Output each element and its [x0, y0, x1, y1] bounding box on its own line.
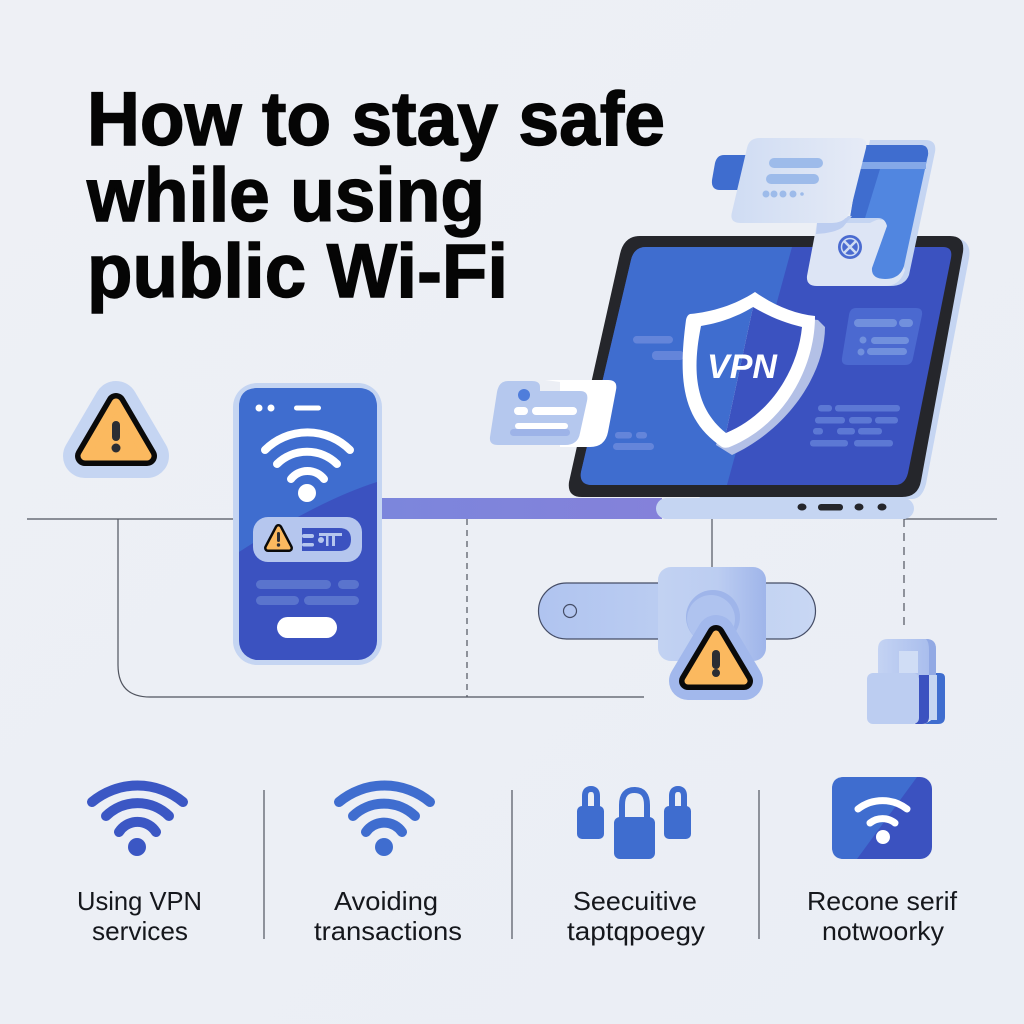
phone status bar	[256, 404, 321, 412]
back panel	[820, 140, 935, 286]
label	[807, 886, 958, 946]
shield outer	[683, 292, 815, 448]
phone text bars	[256, 580, 359, 605]
title: public Wi-Fi	[87, 229, 508, 314]
title: How to stay safe	[87, 77, 665, 162]
laptop	[569, 236, 969, 519]
shield inner	[697, 307, 802, 433]
laptop screen	[581, 247, 951, 485]
connector bar	[382, 498, 662, 519]
label: Recone serif	[807, 886, 958, 916]
label	[567, 886, 705, 946]
blue panel	[850, 145, 928, 279]
label: taptqpoegy	[567, 916, 705, 946]
icon: wifi tile	[832, 777, 932, 859]
blue card	[490, 381, 587, 445]
laptop back edge	[640, 238, 969, 499]
label: services	[92, 916, 188, 946]
phone body	[233, 383, 382, 665]
shield depth	[716, 298, 825, 455]
main card	[731, 138, 866, 234]
phone screen	[239, 388, 377, 660]
lower card	[807, 219, 905, 286]
connector lines	[27, 519, 997, 697]
item: network	[807, 777, 958, 946]
item: using VPN services	[77, 786, 202, 946]
warning icon: left	[85, 403, 147, 456]
shield	[683, 292, 825, 455]
white card	[545, 380, 616, 447]
icon: close circle	[838, 235, 862, 259]
icon: wifi	[92, 786, 183, 856]
screen text left	[613, 336, 684, 450]
laptop base	[656, 498, 914, 519]
label: Using VPN	[77, 886, 202, 916]
label: transactions	[314, 916, 462, 946]
alert pill	[253, 517, 362, 562]
clasp	[658, 567, 766, 661]
icon: wifi	[339, 786, 430, 856]
label: Avoiding	[334, 886, 438, 916]
floating cards top	[712, 138, 935, 286]
title: while using	[86, 153, 485, 238]
blue tab	[712, 155, 750, 190]
item: locks	[567, 789, 705, 946]
screen panel right	[842, 308, 922, 365]
floating card left	[490, 380, 616, 447]
title	[86, 77, 665, 314]
label	[314, 886, 462, 946]
label: Seecuitive	[573, 886, 697, 916]
padlock strap	[538, 567, 816, 661]
small lock	[867, 639, 945, 724]
laptop frame	[569, 236, 963, 497]
column dividers	[264, 790, 759, 939]
phone button	[277, 617, 337, 638]
label: notwoorky	[822, 916, 944, 946]
icon: three padlocks	[577, 789, 691, 859]
label	[77, 886, 202, 946]
icon: phone wifi	[265, 432, 350, 502]
warning icon: padlock	[688, 634, 744, 681]
shield label: VPN	[707, 348, 778, 386]
item: avoiding transactions	[314, 786, 462, 946]
screen text lower right	[810, 405, 900, 446]
phone	[233, 383, 382, 665]
